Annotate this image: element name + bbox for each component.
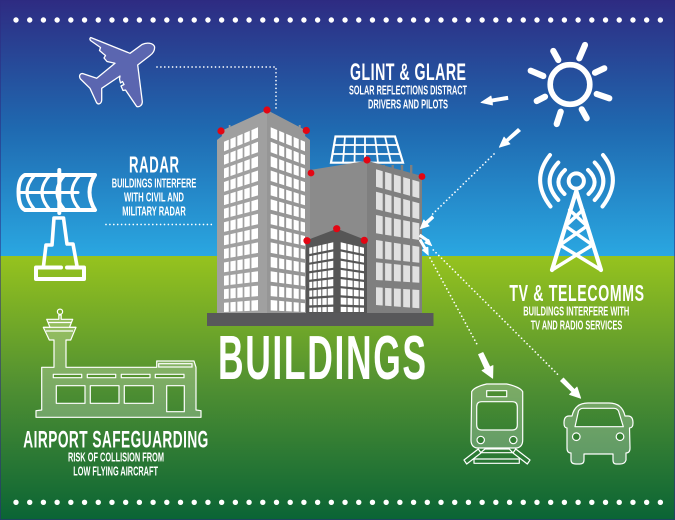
heading: airport safeguarding: AIRPORT SAFEGUARDING — [23, 426, 208, 453]
arrow: to car — [560, 378, 581, 398]
arrow: sun to glint text — [481, 96, 508, 105]
heading: tv and telecomms: TV & TELECOMMS — [509, 280, 644, 307]
description: glint line 2: DRIVERS AND PILOTS — [368, 96, 448, 112]
dotted connector: building to car — [433, 250, 560, 377]
front dark building — [306, 229, 367, 313]
description: airport line 2: LOW FLYING AIRCRAFT — [73, 464, 158, 479]
middle building — [310, 161, 422, 313]
icon: airport — [36, 315, 201, 417]
ground background — [0, 256, 675, 520]
arrow: sun to building — [499, 128, 520, 147]
text block: tv and telecomms — [509, 280, 644, 332]
icon: radar — [18, 170, 95, 279]
red obstruction lights — [217, 106, 425, 244]
text block: airport safeguarding — [23, 426, 208, 479]
heading: radar: RADAR — [129, 152, 179, 178]
main title: BUILDINGS — [218, 322, 426, 393]
top dotted border — [16, 17, 661, 23]
description: airport line 1: RISK OF COLLISION FROM — [68, 450, 164, 465]
arrow: to train — [478, 352, 493, 378]
description: radar line 1: BUILDINGS INTERFERE — [112, 176, 197, 191]
description: glint line 1: SOLAR REFLECTIONS DISTRACT — [349, 82, 467, 98]
text block: glint and glare — [349, 59, 467, 112]
description: radar line 2: WITH CIVIL AND — [124, 190, 184, 205]
icon: sun — [531, 45, 609, 124]
dotted connector: sun to building — [432, 154, 494, 215]
icon: car — [564, 403, 633, 464]
arrow: reflection toward car — [419, 234, 432, 246]
buildings illustration — [207, 106, 434, 326]
dotted connector: building to train — [430, 258, 478, 347]
sky background — [0, 0, 675, 256]
icon: telecoms mast — [540, 155, 613, 270]
dotted connector: aeroplane to building — [157, 67, 276, 108]
icon: aeroplane — [80, 38, 155, 107]
bottom dotted border — [16, 500, 661, 505]
building base — [207, 313, 434, 326]
heading: glint and glare: GLINT & GLARE — [350, 59, 466, 86]
description: radar line 3: MILITARY RADAR — [122, 204, 186, 219]
dotted connector: radar to building — [106, 224, 212, 226]
tall building — [217, 110, 310, 313]
arrow: reflection toward train — [419, 239, 428, 256]
icon: airport tower details — [43, 309, 192, 367]
icon: train — [464, 384, 530, 464]
arrow: reflection into building — [420, 216, 434, 229]
icon: solar panel — [331, 136, 403, 163]
text block: radar — [112, 152, 197, 219]
